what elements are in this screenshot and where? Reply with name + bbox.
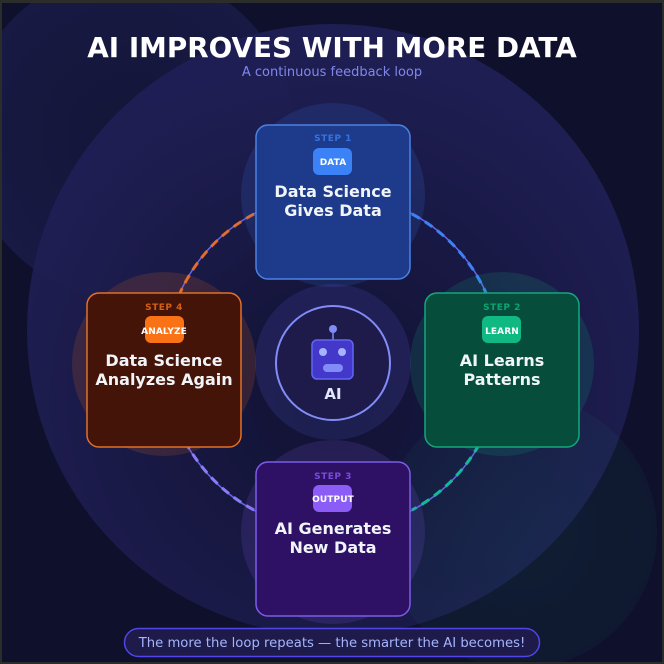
step 1 panel: Data Science bbox=[274, 182, 392, 201]
step 3 panel: STEP 3 bbox=[314, 472, 352, 482]
step 2 panel: Patterns bbox=[463, 370, 541, 389]
step 2 panel: AI Learns bbox=[460, 351, 544, 370]
step 4 panel bbox=[72, 272, 256, 456]
step 4 panel: Data Science bbox=[105, 351, 223, 370]
step 2 panel: STEP 2 bbox=[483, 303, 521, 313]
step 1 panel: STEP 1 bbox=[314, 134, 352, 144]
step 2 panel bbox=[410, 272, 594, 456]
step 3 panel: AI Generates bbox=[275, 519, 391, 538]
step 1 panel: Gives Data bbox=[284, 201, 382, 220]
step 1 panel bbox=[241, 103, 425, 287]
subtitle: A continuous feedback loop bbox=[242, 65, 422, 80]
step 3 panel: OUTPUT bbox=[312, 495, 355, 505]
title: AI IMPROVES WITH MORE DATA bbox=[87, 31, 577, 64]
footer callout: The more the loop repeats — the smarter the AI becomes! bbox=[138, 636, 525, 651]
step 4 panel: Analyzes Again bbox=[95, 370, 233, 389]
AI hub bbox=[255, 284, 411, 440]
step 4 panel: ANALYZE bbox=[141, 327, 187, 337]
AI hub: AI bbox=[324, 385, 342, 403]
icon: robot bbox=[312, 325, 353, 379]
step 3 panel: New Data bbox=[289, 538, 377, 557]
feedback loop arrows bbox=[165, 194, 501, 530]
step 4 panel: STEP 4 bbox=[145, 303, 183, 313]
step 1 panel: DATA bbox=[320, 158, 346, 168]
step 3 panel bbox=[241, 440, 425, 624]
footer callout bbox=[124, 628, 540, 656]
step 2 panel: LEARN bbox=[485, 327, 519, 337]
